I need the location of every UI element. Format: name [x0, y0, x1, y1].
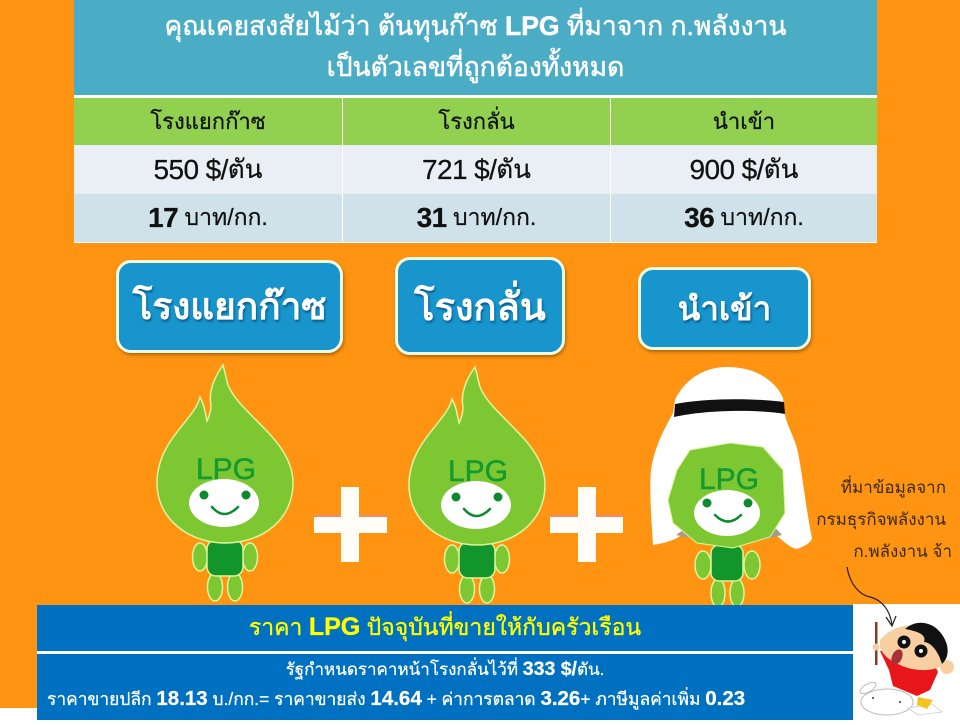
column header: โรงกลั่น: [343, 98, 610, 145]
price per ton: 900: 900 $/: [690, 154, 764, 184]
label: โรงแยกก๊าซ: [116, 260, 343, 353]
refinery price line: รัฐกำหนดราคาหน้าโรงกลั่นไว้ที่ 333 $/ตัน.: [286, 658, 604, 680]
arrow from source note to cartoon: [847, 567, 896, 626]
mascot: LPG flame, gas separation plant: LPG: [196, 453, 256, 486]
source line 2: กรมธุรกิจพลังงาน: [816, 510, 946, 529]
column header: โรงกลั่น: โรงกลั่น: [438, 109, 515, 134]
label: นำเข้า: นำเข้า: [678, 290, 771, 327]
cartoon boy with stick and white dog: [858, 622, 954, 715]
column header: นำเข้า: [611, 98, 877, 145]
price per ton: 721: 721 $/: [422, 154, 496, 184]
mascot: LPG with Arab headdress, import: LPG: [699, 463, 759, 496]
source note: [816, 476, 952, 561]
source line 3: ก.พลังงาน จ้า: [853, 542, 952, 561]
column header: โรงแยกก๊าซ: [74, 98, 342, 145]
price per kg: 17: [74, 194, 342, 242]
column header: นำเข้า: นำเข้า: [713, 109, 775, 134]
mascot: LPG with Arab headdress, import: [650, 367, 812, 607]
column header: โรงแยกก๊าซ: โรงแยกก๊าซ: [150, 109, 266, 134]
label: โรงกลั่น: โรงกลั่น: [414, 286, 546, 328]
price per ton: 550: 550 $/: [154, 154, 228, 184]
table title: เป็นตัวเลขที่ถูกต้องทั้งหมด: [327, 52, 624, 82]
price per kg: 36: [611, 194, 877, 242]
label: โรงกลั่น: [395, 257, 565, 355]
mascot: LPG flame, gas separation plant: [157, 365, 293, 601]
retail price breakdown: ราคาขายปลีก 18.13 บ./กก.= ราคาขายส่ง 14.64 + ค่าการตลาด 3.26+ ภาษีมูลค่าเพิ่ม 0.23: [47, 687, 745, 710]
price per ton: 900: [611, 145, 877, 194]
price per kg: 36: 36: [684, 202, 714, 233]
price per kg: 31: บาท/กก.: [453, 204, 536, 230]
table title: [74, 0, 877, 95]
table title: คุณเคยสงสัยไม้ว่า ต้นทุนก๊าซ LPG ที่มาจาก ก.พลังงาน: [164, 11, 786, 41]
white corner panel: [853, 604, 960, 725]
price per kg: 36: บาท/กก.: [720, 204, 804, 230]
label: โรงแยกก๊าซ: โรงแยกก๊าซ: [132, 286, 327, 327]
price panel: [37, 605, 853, 720]
price per kg: 17: 17: [148, 202, 178, 233]
price per kg: 31: [343, 194, 610, 242]
price per ton: 721: ตัน: [496, 154, 531, 184]
panel heading: ราคา LPG ปัจจุบันที่ขายให้กับครัวเรือน: [249, 613, 641, 641]
price per ton: 721: [343, 145, 610, 194]
price per kg: 31: 31: [417, 202, 447, 233]
panel body: [37, 654, 853, 720]
plus sign 1: [314, 487, 387, 562]
label: นำเข้า: [638, 267, 811, 350]
cost table: [74, 0, 877, 243]
mascot: LPG flame, refinery: LPG: [448, 455, 508, 488]
source line 1: ที่มาข้อมูลจาก: [841, 478, 946, 497]
mascot: LPG flame, refinery: [409, 367, 545, 603]
plus sign 2: [550, 487, 623, 562]
price per ton: 550: ตัน: [228, 154, 262, 184]
price per kg: 17: บาท/กก.: [184, 204, 268, 230]
price per ton: 550: [74, 145, 342, 194]
panel heading: [37, 605, 853, 651]
price per ton: 900: ตัน: [764, 154, 798, 184]
